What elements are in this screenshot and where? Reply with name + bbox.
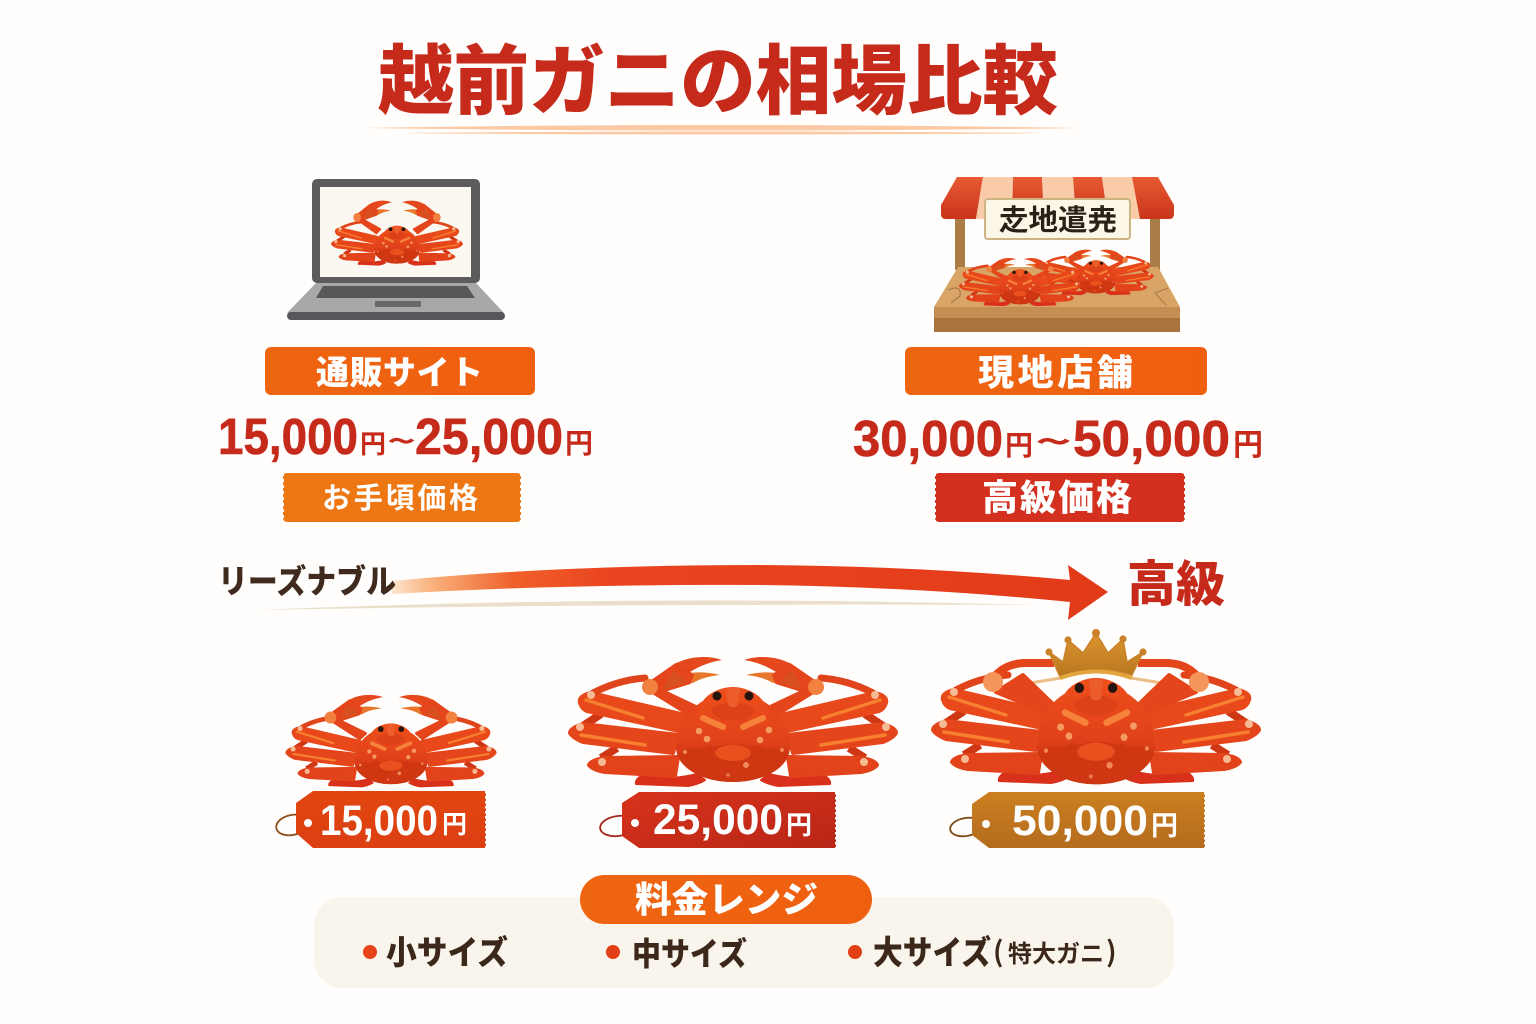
price: online shop xyxy=(218,408,593,465)
price: online shop: ~ xyxy=(387,417,416,461)
price: local store: 円 xyxy=(1233,420,1263,464)
crab: medium with price tag xyxy=(570,657,896,848)
price: local store: 30,000 xyxy=(853,410,1003,467)
panel: price range legend xyxy=(314,871,1174,988)
legend: large size: 大サイズ xyxy=(873,926,991,974)
legend: large size: ( xyxy=(993,931,1004,971)
label: local store xyxy=(905,344,1207,396)
legend: large size xyxy=(848,926,1117,974)
badge: premium price: 高級価格 xyxy=(982,469,1132,521)
label: online shop xyxy=(265,346,535,395)
badge: premium price xyxy=(935,469,1185,522)
price: local store: 円 xyxy=(1005,424,1033,464)
crab: small with price tag xyxy=(274,695,495,848)
price: local store: 50,000 xyxy=(1073,410,1230,467)
price: online shop: 円 xyxy=(565,422,593,462)
icon: crown xyxy=(1045,629,1147,678)
label: reasonable: リーズナブル xyxy=(218,555,396,603)
crab: medium with price tag: 円 xyxy=(786,805,812,842)
heading pill: price range: 料金レンジ xyxy=(635,871,818,923)
crab: large with crown and price tag xyxy=(933,629,1259,848)
legend: small size: 小サイズ xyxy=(386,926,508,974)
crab: large with crown and price tag: 円 xyxy=(1151,804,1178,843)
crab: small with price tag: 円 xyxy=(442,805,467,841)
crab: medium with price tag: 25,000 xyxy=(653,796,783,844)
price: local store xyxy=(853,410,1263,467)
heading pill: price range xyxy=(580,871,872,924)
legend: large size: 特大ガニ xyxy=(1008,934,1104,969)
crab: large with crown and price tag: 50,000 xyxy=(1012,797,1148,845)
crab: small with price tag: 15,000 xyxy=(320,797,438,845)
price: local store: ~ xyxy=(1035,415,1072,464)
badge: affordable price: お手頃価格 xyxy=(322,475,478,517)
icon: market stall with crabs: 赱地遣尭 xyxy=(999,197,1117,239)
price: online shop: 25,000 xyxy=(415,408,563,465)
price: online shop: 15,000 xyxy=(218,408,358,465)
legend: medium size: 中サイズ xyxy=(632,929,747,975)
icon: laptop with crab xyxy=(287,179,505,320)
price: online shop: 円 xyxy=(360,424,386,461)
arrow: reasonable to premium xyxy=(255,565,1108,620)
label: local store: 現地店舗 xyxy=(978,344,1133,396)
title: 越前ガニの相場比較 xyxy=(378,20,1058,130)
badge: affordable price xyxy=(283,473,521,522)
label: premium: 高級 xyxy=(1127,545,1225,616)
icon: market stall with crabs xyxy=(934,177,1180,332)
label: online shop: 通販サイト xyxy=(316,346,483,394)
legend: large size: ) xyxy=(1106,931,1117,971)
